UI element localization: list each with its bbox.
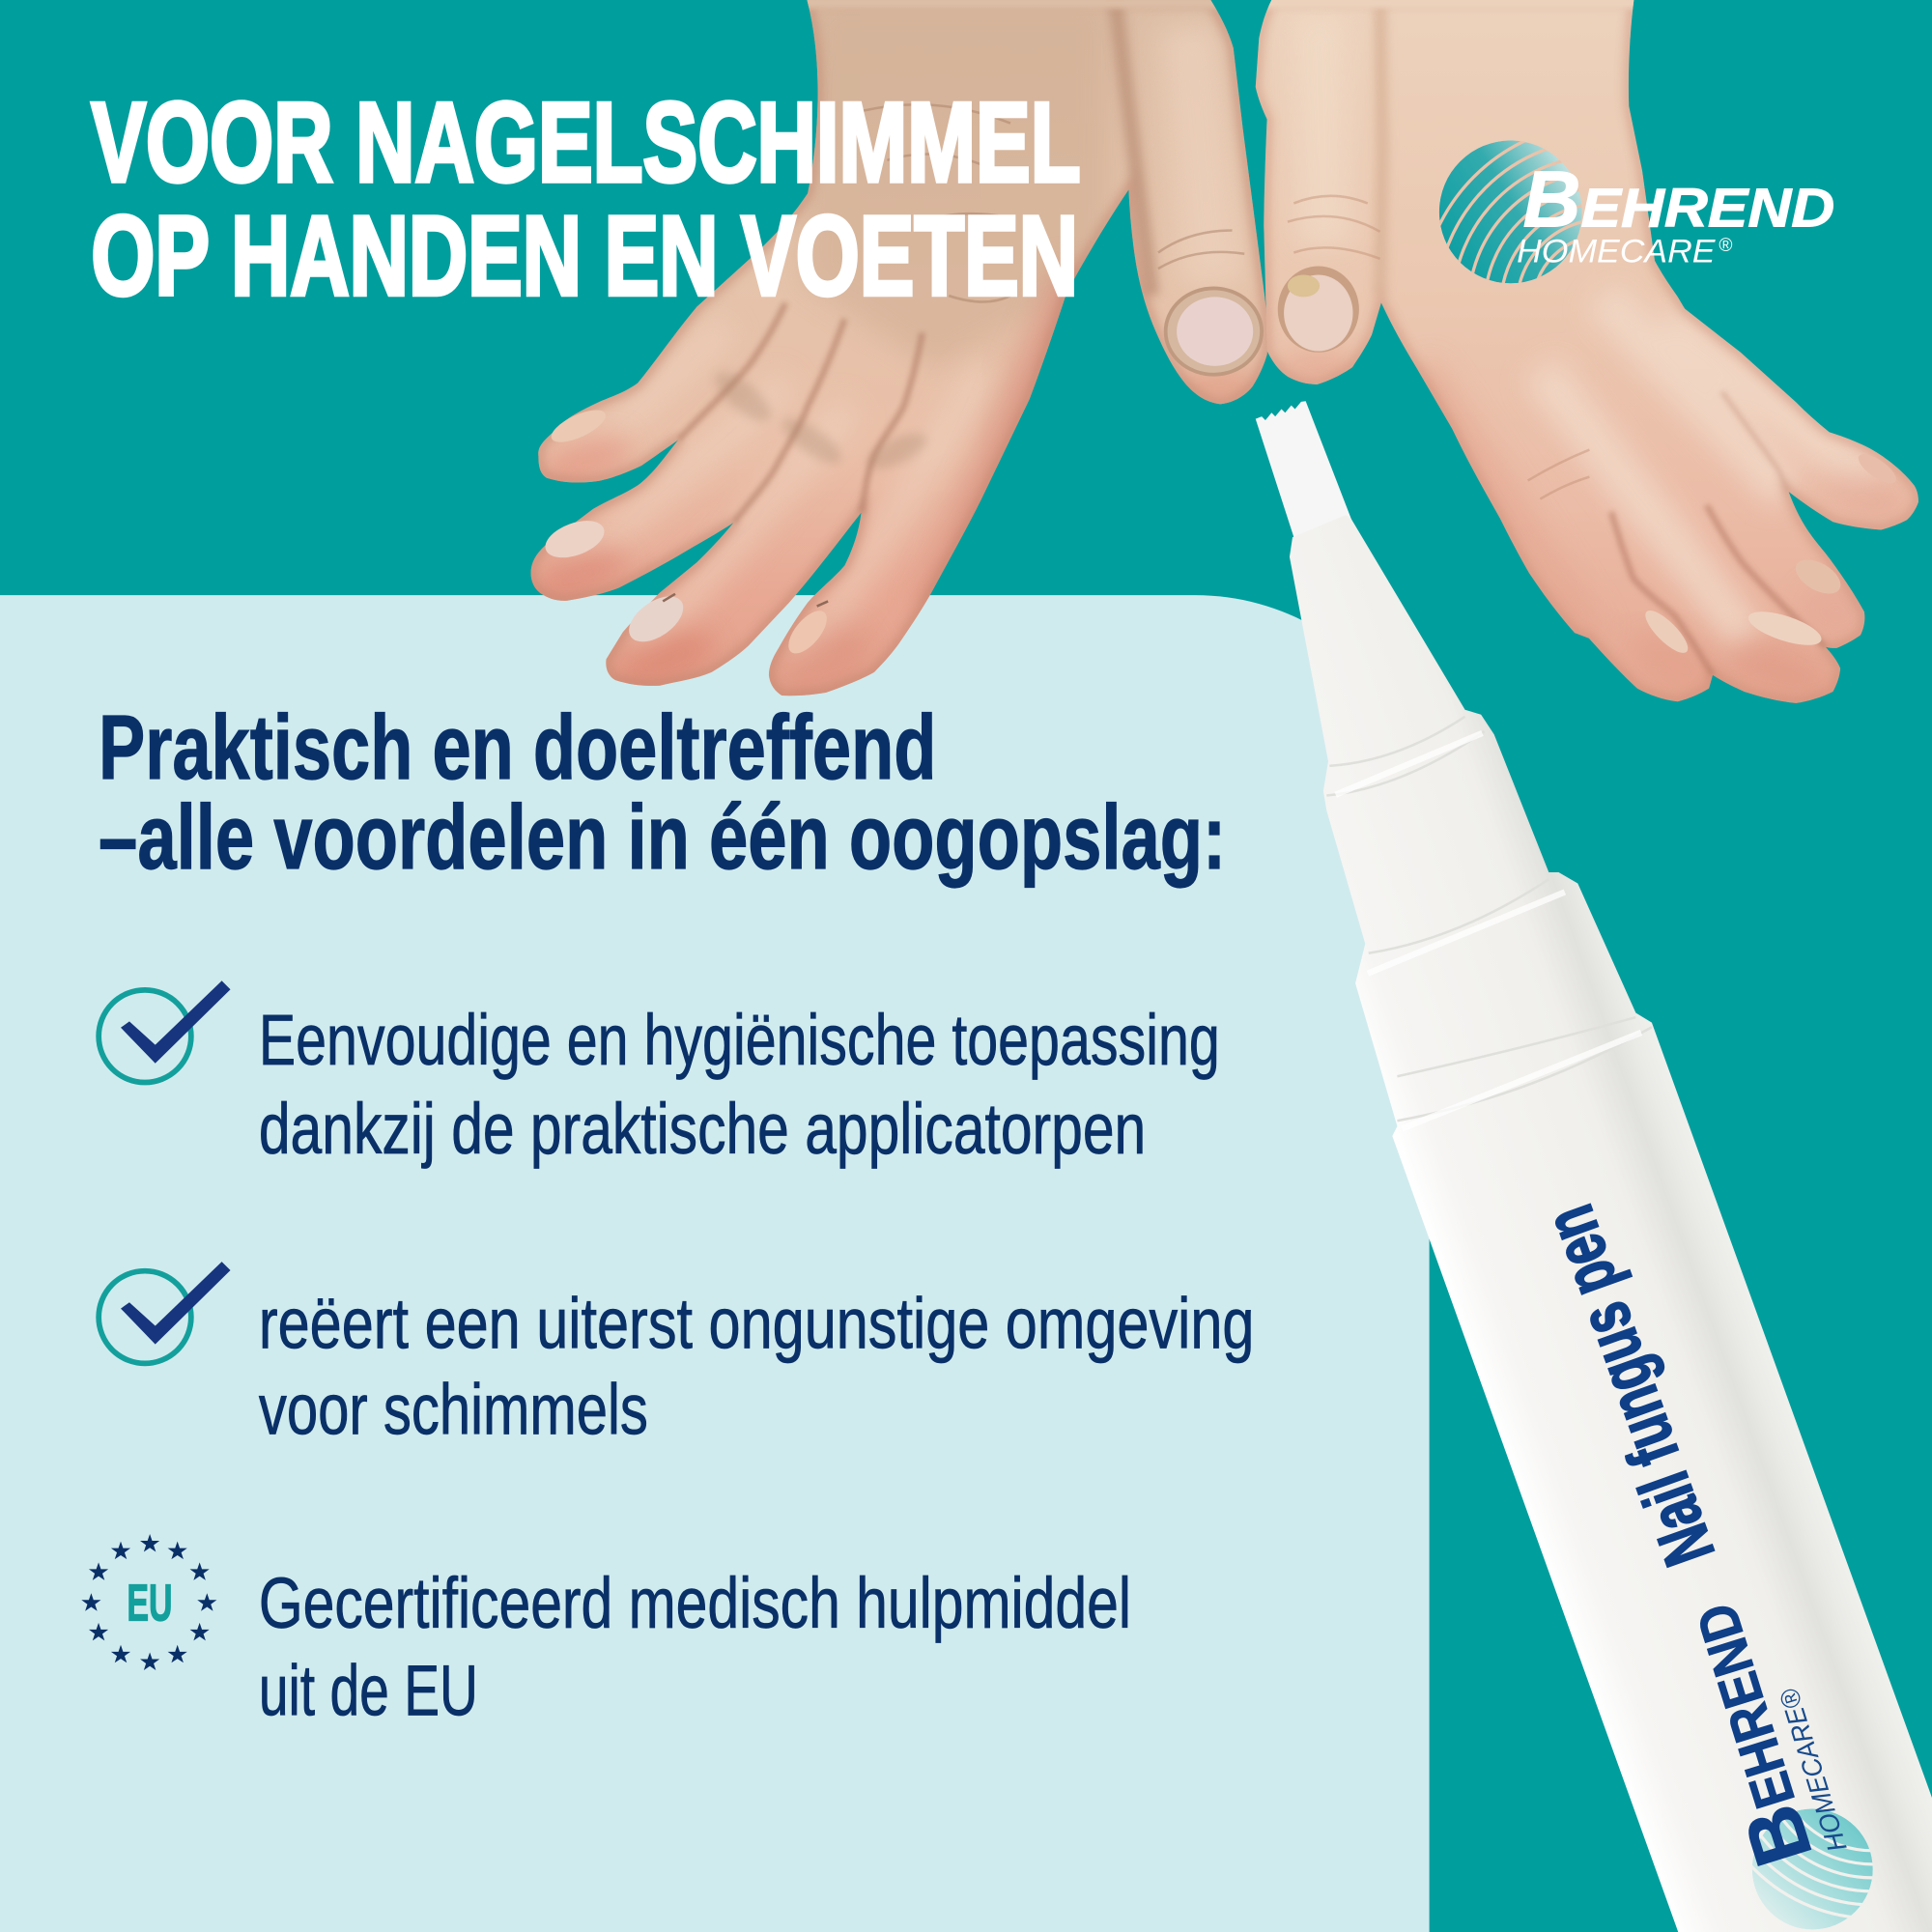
logo swirl xyxy=(1439,141,1582,284)
heading: –alle voordelen in één oogopslag: xyxy=(99,787,1226,889)
edge shading xyxy=(531,0,1267,696)
nails: left hand xyxy=(540,288,1262,660)
pen logo: Behrend Homecare: EHREND xyxy=(1685,1597,1807,1815)
heading: Praktisch en doeltreffend xyxy=(99,697,936,799)
pen logo: Behrend Homecare xyxy=(1685,1597,1829,1876)
icon: EU stars xyxy=(81,1534,216,1670)
icon: EU stars: EU xyxy=(127,1575,173,1632)
text: benefit 1: dankzij de praktische applicatorpen xyxy=(259,1089,1146,1169)
soften top edge xyxy=(788,0,1220,8)
pen body xyxy=(1290,515,1932,1932)
photo: left hand xyxy=(523,0,1267,711)
text: benefit 1: Eenvoudige en hygiënische toepassing xyxy=(259,1000,1220,1080)
pen brush xyxy=(1256,401,1351,545)
nail: left thumb xyxy=(1166,288,1262,375)
logo: Behrend Homecare: ® xyxy=(1719,236,1732,256)
pen logo: swirl xyxy=(1752,1808,1873,1930)
knuckle creases xyxy=(715,371,771,422)
icon: check 2 xyxy=(99,1262,231,1363)
logo: Behrend Homecare: B xyxy=(1523,155,1580,244)
panel: benefits xyxy=(0,595,1430,1932)
pen logo: Behrend Homecare: B xyxy=(1726,1795,1829,1876)
nail: right thumb xyxy=(1278,267,1359,353)
pen label: Nail fungus pen: Nail fungus pen xyxy=(1528,1196,1730,1576)
edge shading xyxy=(1256,0,1918,703)
text: benefit 3: uit de EU xyxy=(259,1651,478,1731)
title: OP HANDEN EN VOETEN xyxy=(91,192,1078,319)
logo: Behrend Homecare: EHREND xyxy=(1580,178,1834,239)
text: benefit 2: reëert een uiterst ongunstige omgeving xyxy=(259,1283,1254,1363)
heading xyxy=(99,697,1226,889)
back of hand tan shading xyxy=(801,0,1109,370)
icon: check 1 xyxy=(99,980,231,1083)
product: applicator pen xyxy=(1256,401,1932,1932)
pen logo: Homecare: HOMECARE® xyxy=(1774,1685,1853,1856)
text: benefit 3 xyxy=(259,1563,1131,1731)
title: VOOR NAGELSCHIMMEL xyxy=(91,78,1081,205)
nails: right hand xyxy=(1639,449,1900,659)
logo: Behrend Homecare xyxy=(1439,141,1833,284)
title xyxy=(91,79,1081,319)
thumb colouring xyxy=(1115,0,1152,296)
text: benefit 2 xyxy=(259,1283,1254,1450)
soften top edge xyxy=(1257,0,1638,8)
finger separations xyxy=(678,303,923,523)
logo: Behrend Homecare: HOMECARE xyxy=(1517,234,1717,270)
text: benefit 3: Gecertificeerd medisch hulpmiddel xyxy=(259,1563,1131,1643)
photo: right hand xyxy=(1256,0,1918,713)
text: benefit 2: voor schimmels xyxy=(259,1370,648,1450)
text: benefit 1 xyxy=(259,1000,1220,1169)
finger separations xyxy=(1611,512,1713,675)
